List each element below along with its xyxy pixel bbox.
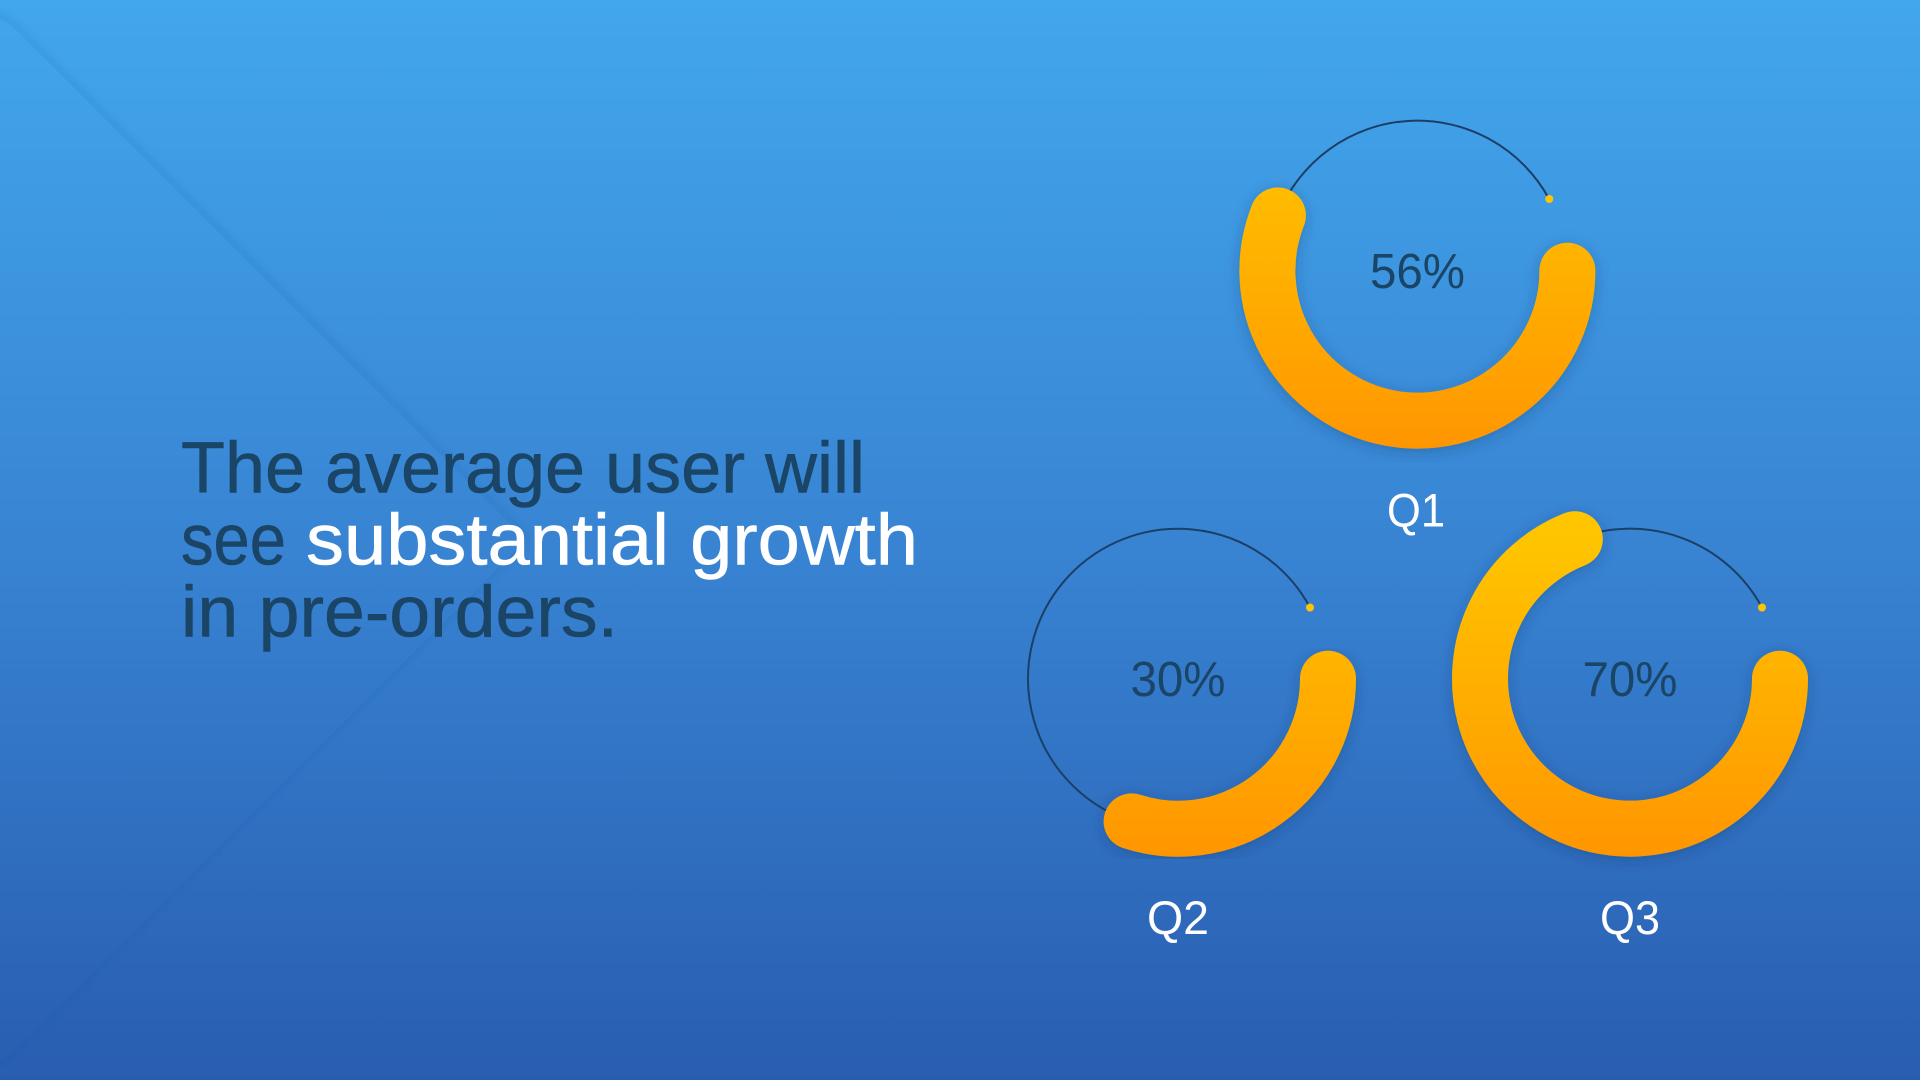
- Q3 dot: [1758, 604, 1766, 612]
- Q2 percentage: 30%: [1130, 653, 1226, 707]
- chart: Q1 56% ring: [1267, 121, 1567, 537]
- Q1 label: Q1: [1387, 484, 1445, 537]
- Q3 percentage: 70%: [1582, 653, 1678, 707]
- Q1 percentage: 56%: [1370, 245, 1465, 299]
- Q2 label: Q2: [1147, 891, 1209, 944]
- Q2 orange progress arc: [1132, 679, 1328, 829]
- Q1 dot: [1545, 195, 1553, 203]
- chart: Q2 30% ring: [1028, 529, 1328, 944]
- headline: substantial growth: [306, 501, 918, 581]
- Q2 dot: [1306, 604, 1314, 612]
- Q3 label: Q3: [1600, 891, 1660, 944]
- chart: Q3 70% ring: [1480, 529, 1780, 944]
- background chevron shape: [0, 6, 526, 1072]
- headline: see: [181, 501, 286, 581]
- Q2 thin track arc: [1028, 529, 1310, 821]
- Q1 orange progress arc: [1267, 216, 1567, 421]
- headline: [181, 429, 918, 653]
- headline: in pre-orders.: [181, 573, 618, 653]
- Q3 thin track arc: [1575, 529, 1762, 607]
- headline: The average user will: [181, 429, 865, 509]
- Q1 thin track arc: [1278, 121, 1549, 216]
- Q3 orange progress arc: [1480, 539, 1780, 829]
